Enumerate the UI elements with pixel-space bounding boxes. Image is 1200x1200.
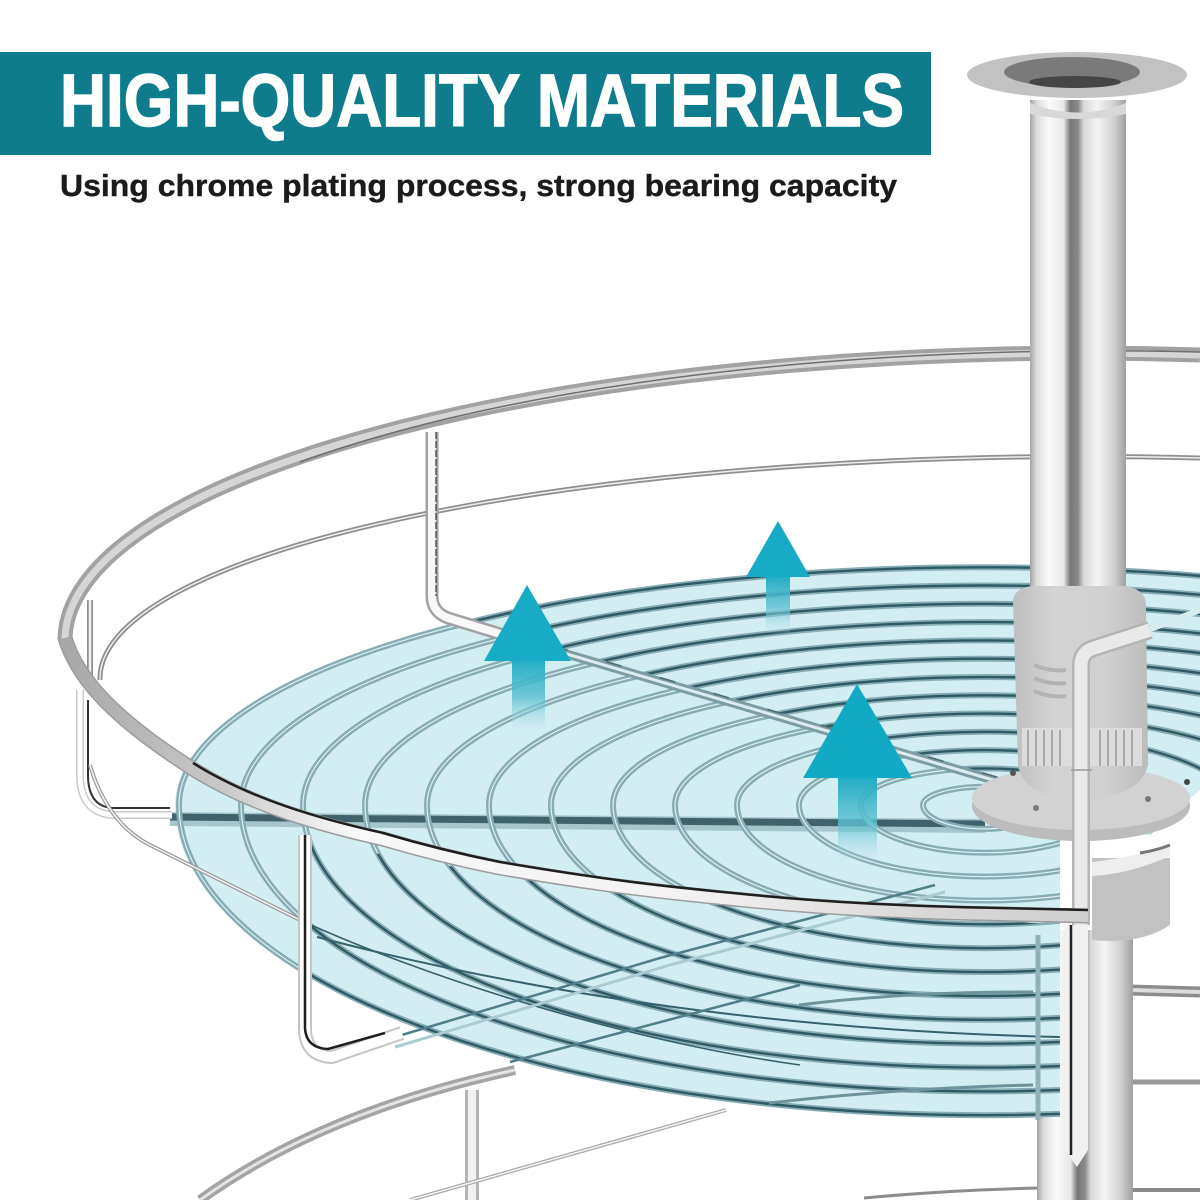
front wire post with foot <box>305 835 402 1057</box>
upward arrow small back <box>746 521 810 633</box>
faint post seen through plate <box>1036 935 1040 1120</box>
left wire post and foot <box>80 600 300 920</box>
lower chrome pole section <box>1037 930 1133 1200</box>
concentric wire rings <box>179 567 1200 1115</box>
upward arrow left <box>484 585 571 731</box>
grey plastic collar <box>1013 586 1148 800</box>
title banner <box>0 52 931 155</box>
back cross rod <box>564 648 999 782</box>
wire post below rim <box>1065 925 1088 1167</box>
front lower rails <box>300 885 1060 1103</box>
lower grey bearing cylinder <box>1092 845 1170 941</box>
front rim of the tray <box>65 638 1088 916</box>
title: HIGH-QUALITY MATERIALS <box>60 59 904 142</box>
front wire post by collar <box>1071 610 1200 925</box>
back wire post <box>432 432 520 640</box>
back rim of the tray <box>65 351 1200 680</box>
main cross rod <box>170 817 985 826</box>
subtitle: Using chrome plating process, strong bearing capacity <box>60 168 898 203</box>
blue tray plate with concentric wires <box>170 565 1200 1120</box>
base flange <box>972 766 1190 841</box>
lower basket tier <box>200 990 1200 1200</box>
central chrome pole <box>1030 100 1126 600</box>
top mounting flange <box>967 52 1187 119</box>
upward arrow large <box>803 684 912 862</box>
